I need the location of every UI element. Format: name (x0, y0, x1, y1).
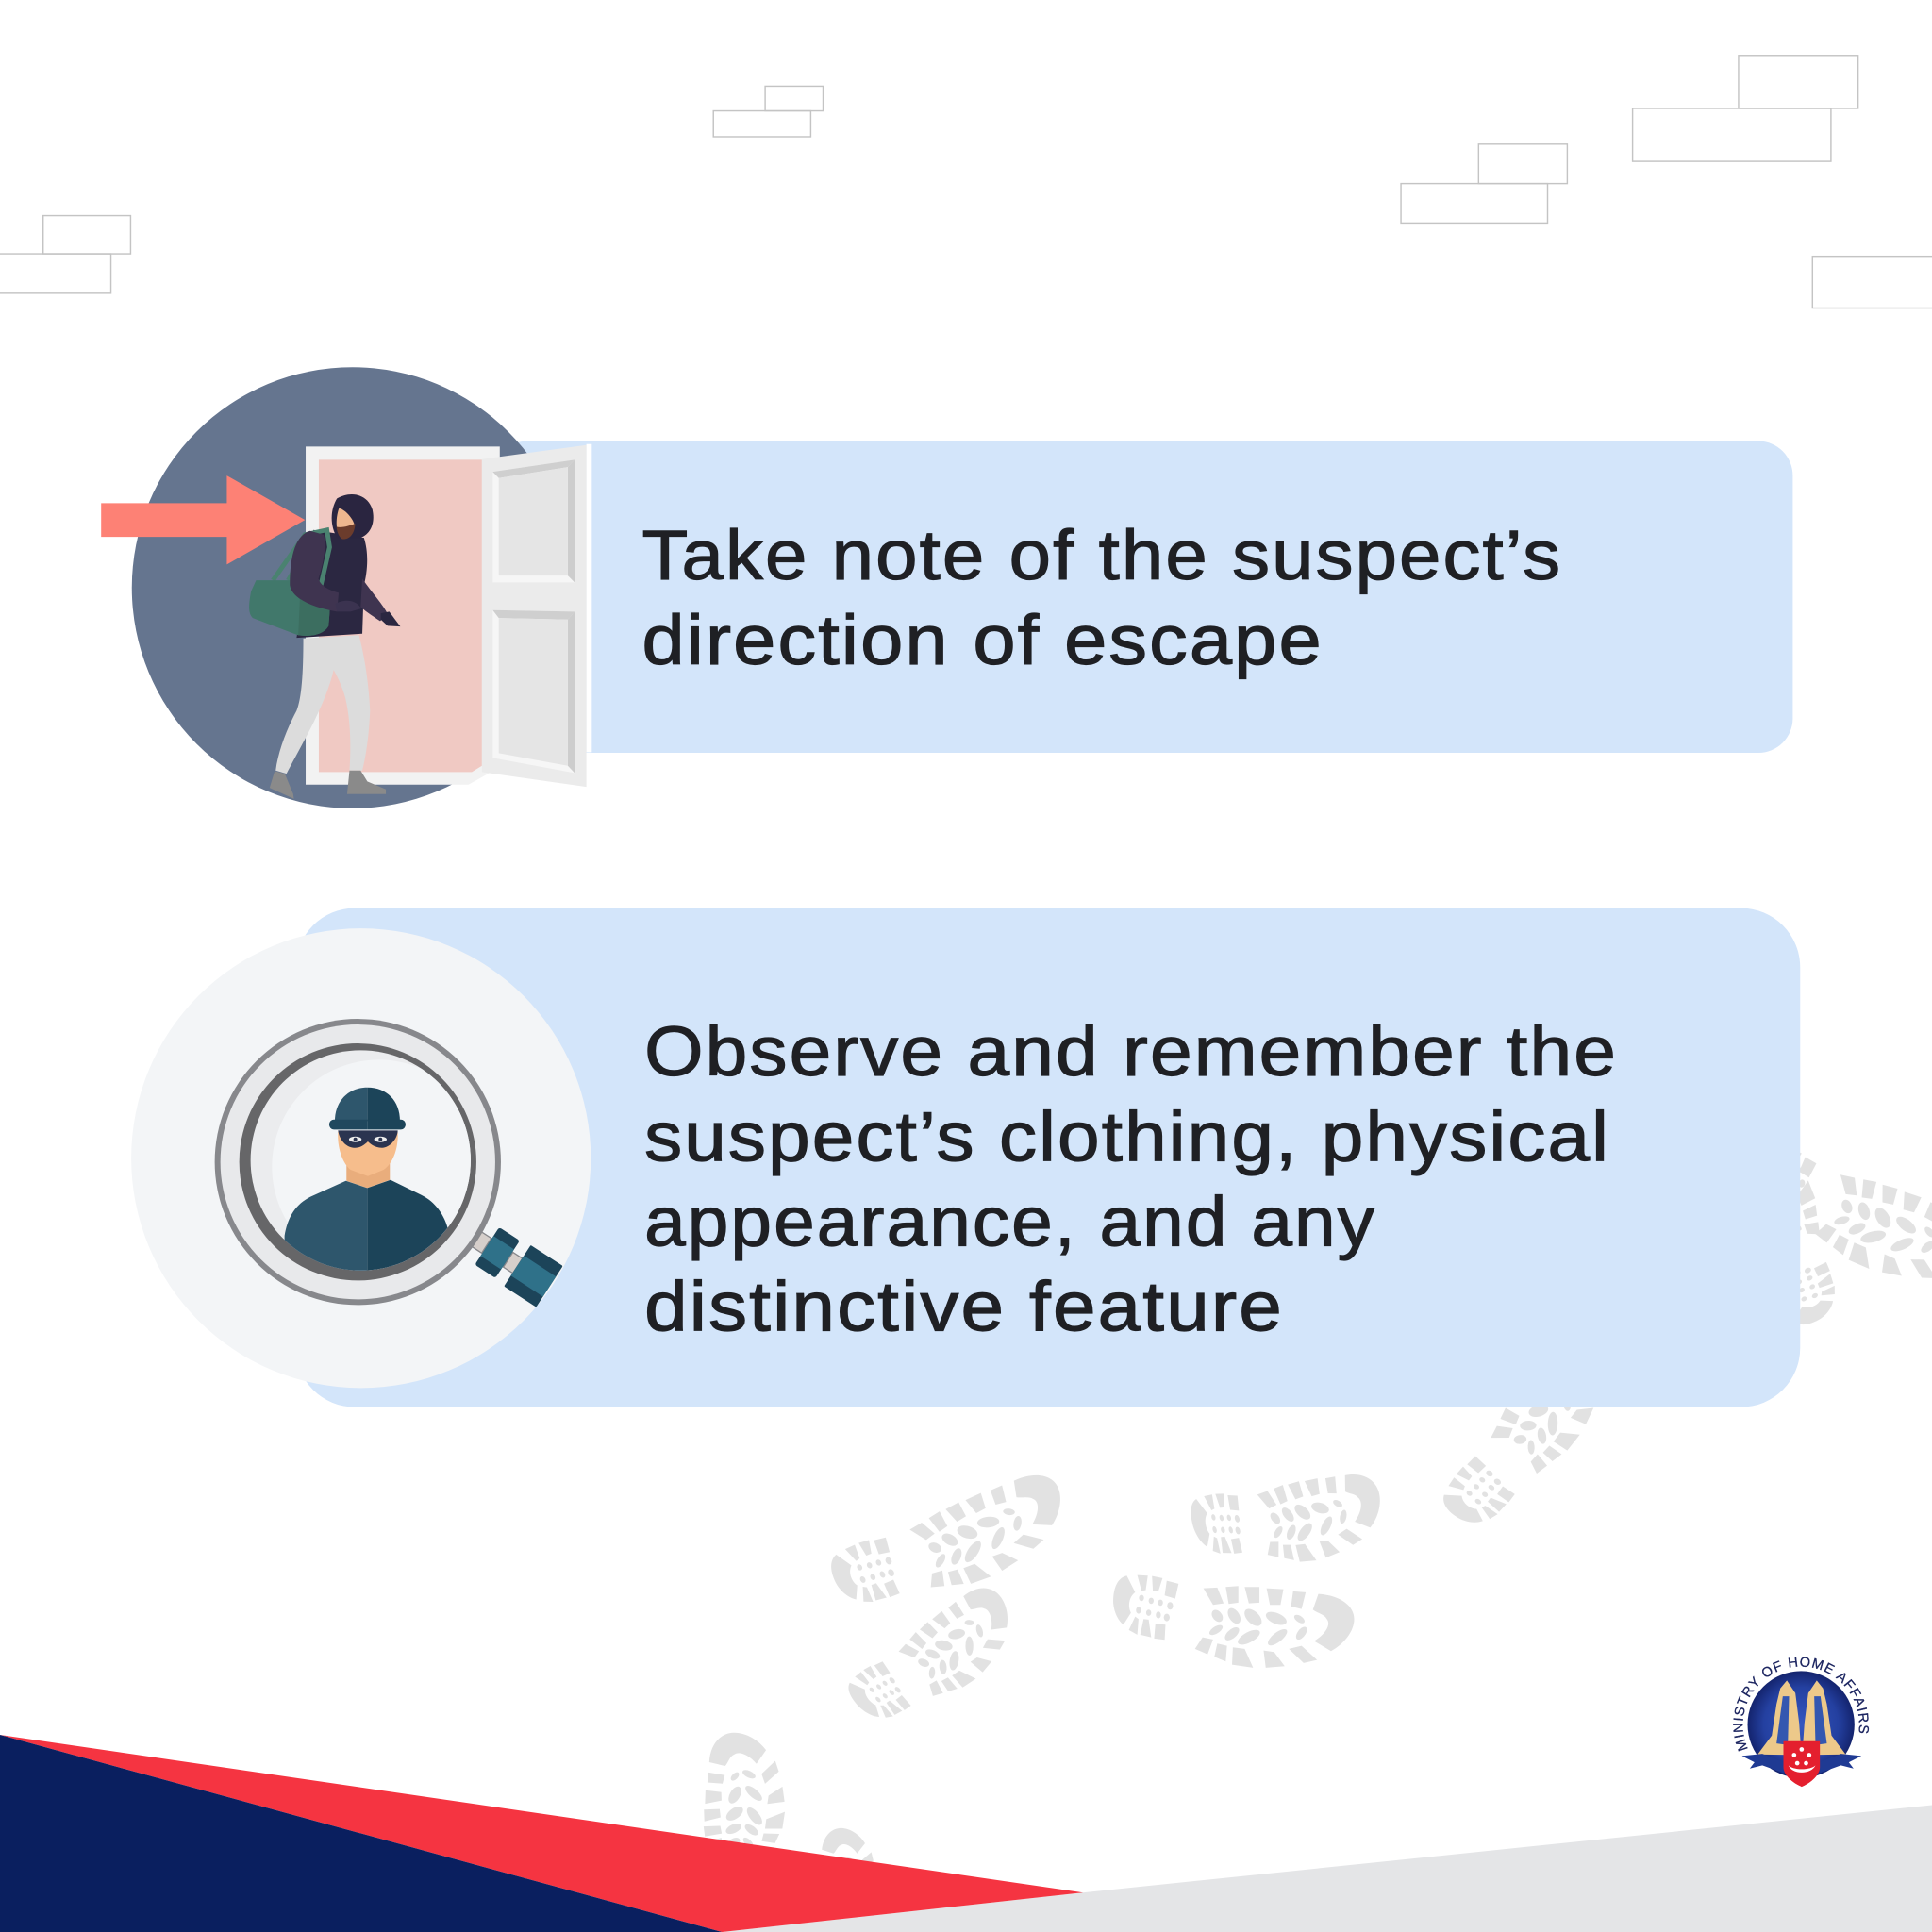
panel: card 2 background (295, 908, 1800, 1407)
open door leaf (482, 445, 587, 787)
text: card 2 (644, 1012, 1618, 1346)
text: card 2: distinctive feature (644, 1268, 1284, 1346)
text: card 2: appearance, and any (644, 1182, 1376, 1260)
text: card 2: Observe and remember the (644, 1012, 1618, 1091)
lens (251, 1050, 471, 1271)
decorative outlined bricks (0, 56, 1932, 308)
text: card 2: suspect’s clothing, physical (644, 1097, 1610, 1175)
circle behind magnifier illustration (131, 928, 591, 1388)
bottom colour band (0, 1735, 1932, 1932)
logo: Ministry of Home Affairs: MINISTRY OF HOME AFFAIRS (1733, 1657, 1870, 1751)
text: card 1: direction of escape (641, 601, 1324, 679)
arrow pointing to door (101, 475, 305, 564)
masked suspect bust (285, 1088, 448, 1274)
text: card 1 (641, 516, 1562, 679)
magnifier ring (215, 1019, 501, 1305)
circle behind escape illustration (132, 367, 573, 808)
doorway interior (319, 459, 482, 772)
illustration: masked suspect under magnifying glass (215, 1019, 563, 1307)
illustration: suspect escaping through door (101, 444, 591, 799)
footprints trail (690, 1102, 1932, 1932)
panel: card 1 background (492, 441, 1792, 753)
magnifier handle (460, 1217, 563, 1307)
text: card 1: Take note of the suspect’s (641, 516, 1562, 594)
door frame (306, 446, 500, 785)
suspect figure (249, 494, 400, 799)
